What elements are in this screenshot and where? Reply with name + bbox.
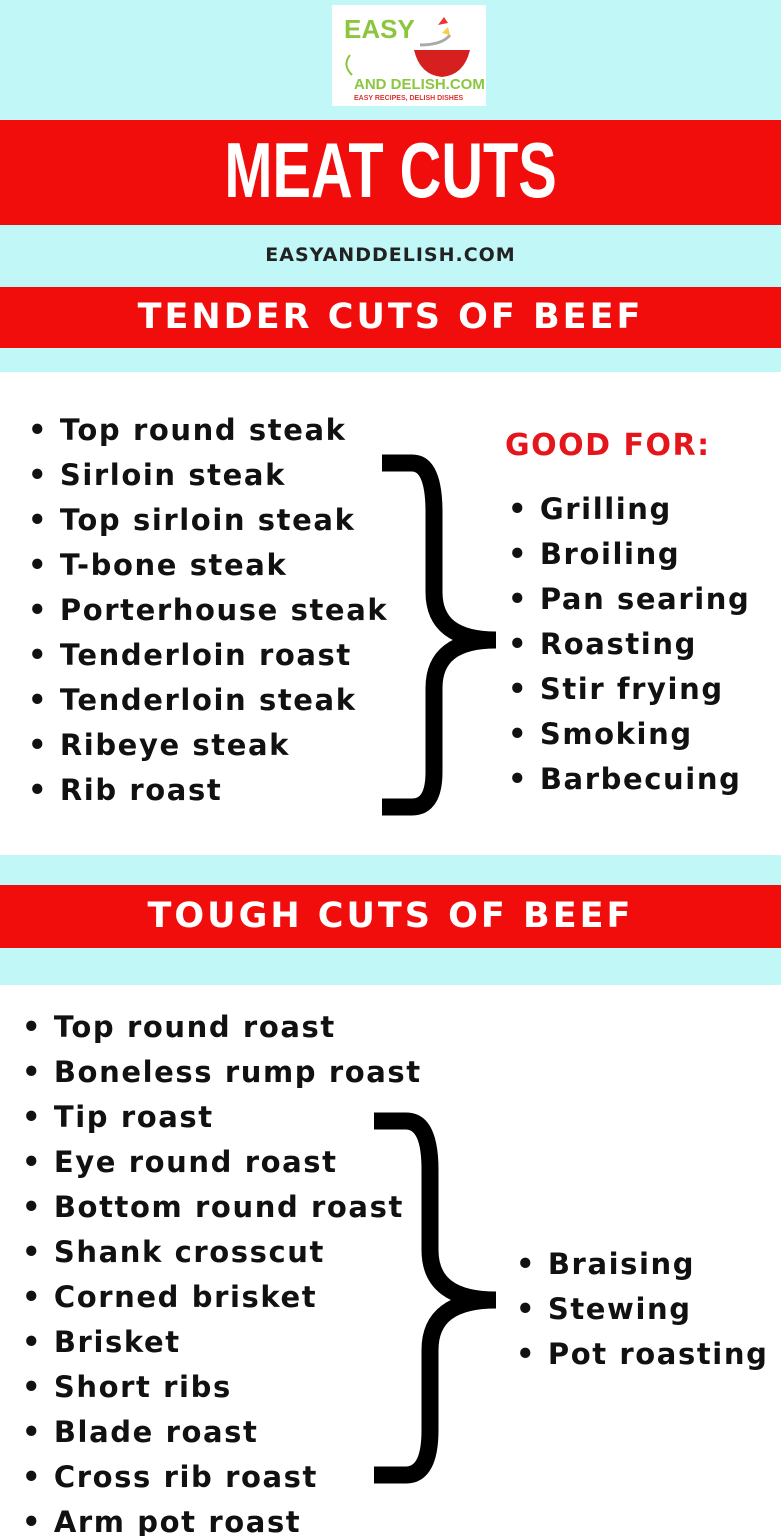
brace (374, 1112, 496, 1484)
list: methods: Stewing (548, 1292, 692, 1326)
list: methods (520, 1247, 768, 1371)
panel: tender cuts (0, 372, 781, 855)
site url: EASYANDDELISH.COM (265, 244, 516, 266)
list: tender cuts: Tenderloin steak (60, 683, 357, 717)
list: tender cuts: Ribeye steak (60, 728, 290, 762)
heading: tender: TENDER CUTS OF BEEF (138, 297, 643, 337)
list: tough cuts: Blade roast (54, 1415, 258, 1449)
logo: AND DELISH.COM (354, 76, 485, 93)
list: tough cuts: Cross rib roast (54, 1460, 318, 1494)
list: tender cuts: Sirloin steak (60, 458, 286, 492)
title banner (0, 120, 781, 225)
list: tough cuts: Bottom round roast (54, 1190, 404, 1224)
list: tough cuts: Brisket (54, 1325, 181, 1359)
list: tender cuts (32, 413, 388, 807)
logo: EASY (344, 14, 415, 44)
list: tough cuts: Short ribs (54, 1370, 232, 1404)
good for heading: GOOD FOR: (505, 428, 711, 463)
list: tender cuts: Porterhouse steak (60, 593, 388, 627)
logo (332, 5, 486, 106)
list: tough cuts: Shank crosscut (54, 1235, 325, 1269)
list: methods: Smoking (540, 717, 693, 751)
list: tender cuts: Top sirloin steak (60, 503, 355, 537)
list: methods (512, 492, 750, 796)
brace (382, 454, 496, 816)
list: tender cuts: Top round steak (60, 413, 347, 447)
list: tender cuts: T-bone steak (60, 548, 287, 582)
list: methods: Braising (548, 1247, 695, 1281)
list: methods: Grilling (540, 492, 672, 526)
list: tough cuts: Eye round roast (54, 1145, 338, 1179)
list: methods: Pot roasting (548, 1337, 768, 1371)
list: tough cuts: Top round roast (54, 1010, 336, 1044)
panel: tough cuts (0, 985, 781, 1536)
list: tender cuts: Rib roast (60, 773, 222, 807)
list: methods: Roasting (540, 627, 697, 661)
heading: tough (0, 885, 781, 948)
list: methods: Stir frying (540, 672, 724, 706)
list: methods: Broiling (540, 537, 680, 571)
list: tough cuts: Tip roast (54, 1100, 214, 1134)
title banner: MEAT CUTS (224, 126, 557, 214)
list: methods: Pan searing (540, 582, 750, 616)
list: methods: Barbecuing (540, 762, 741, 796)
list: tough cuts: Boneless rump roast (54, 1055, 422, 1089)
list: tough cuts (26, 1010, 422, 1536)
list: tender cuts: Tenderloin roast (60, 638, 352, 672)
heading: tough: TOUGH CUTS OF BEEF (148, 896, 633, 936)
heading: tender (0, 287, 781, 348)
logo: EASY RECIPES, DELISH DISHES (354, 95, 464, 102)
list: tough cuts: Corned brisket (54, 1280, 317, 1314)
